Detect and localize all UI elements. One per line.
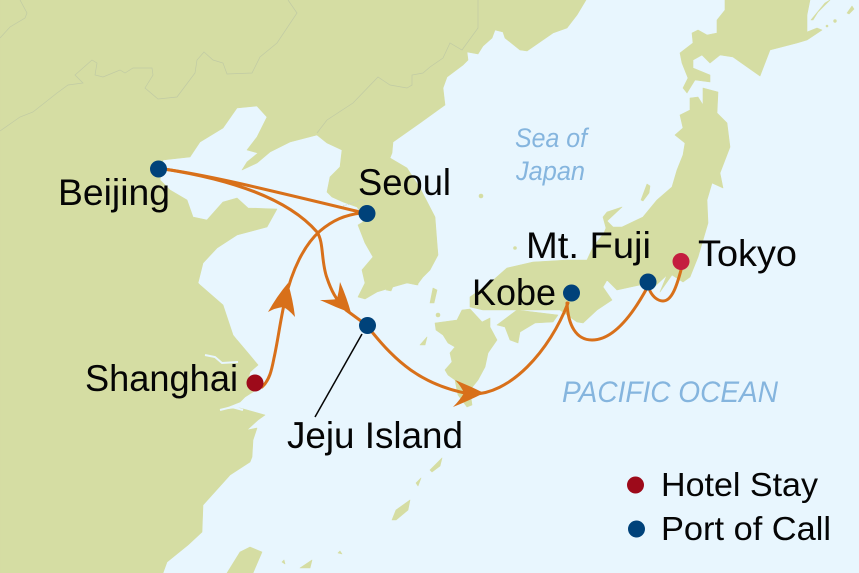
label: Beijing: Beijing xyxy=(58,172,170,213)
legend item: Hotel Stay: Hotel Stay xyxy=(661,466,819,503)
arrowhead: toward Jeju Island xyxy=(320,282,351,313)
label: Shanghai: Shanghai xyxy=(85,358,238,399)
land: Taiwan xyxy=(227,547,262,573)
land: China and Korea mainland xyxy=(0,0,586,573)
land: Shikoku xyxy=(497,310,558,343)
marker: Jeju Island xyxy=(359,317,376,334)
land: Kyushu xyxy=(435,309,497,407)
label: Sea of Japan xyxy=(515,123,589,186)
label: Pacific Ocean: PACIFIC OCEAN xyxy=(562,376,778,409)
land: Honshu xyxy=(470,88,730,323)
route: Beijing to Seoul xyxy=(164,169,360,212)
marker: Seoul xyxy=(358,205,376,222)
label: Mt. Fuji: Mt. Fuji xyxy=(526,225,651,266)
label: Kobe: Kobe xyxy=(472,272,556,313)
marker: Beijing xyxy=(150,160,167,178)
arrowhead: toward Kobe xyxy=(453,380,484,407)
water labels xyxy=(515,123,778,409)
arrowhead: northbound from Shanghai xyxy=(268,283,295,317)
marker: Kobe xyxy=(563,284,580,302)
label: Seoul: Seoul xyxy=(358,162,451,203)
route: Beijing to Jeju Island xyxy=(164,169,361,321)
leader line: Jeju Island xyxy=(315,334,362,417)
marker: Shanghai xyxy=(246,374,264,392)
country borders xyxy=(0,0,478,206)
label: Tokyo: Tokyo xyxy=(698,233,797,274)
marker: Tokyo xyxy=(672,253,690,270)
route: Shanghai to Seoul xyxy=(262,213,361,387)
rivers at Shanghai xyxy=(205,355,243,410)
route lines xyxy=(164,169,681,394)
land: Hokkaido xyxy=(680,0,822,93)
route: Kobe to Mt. Fuji xyxy=(567,288,647,340)
label: Jeju Island: Jeju Island xyxy=(287,415,463,456)
route arrowheads xyxy=(268,282,484,407)
land: small islands xyxy=(282,0,854,568)
legend xyxy=(627,466,831,547)
port markers xyxy=(150,160,690,392)
label: Sea of Japan: Sea of xyxy=(515,123,589,153)
marker: Mt. Fuji xyxy=(640,274,656,290)
route: Mt. Fuji to Tokyo xyxy=(650,270,681,301)
label: Sea of Japan: Japan xyxy=(515,156,585,186)
route: Jeju Island to Kobe xyxy=(372,303,568,394)
legend item: Port of Call: Port of Call xyxy=(661,510,831,547)
city labels xyxy=(58,162,797,456)
